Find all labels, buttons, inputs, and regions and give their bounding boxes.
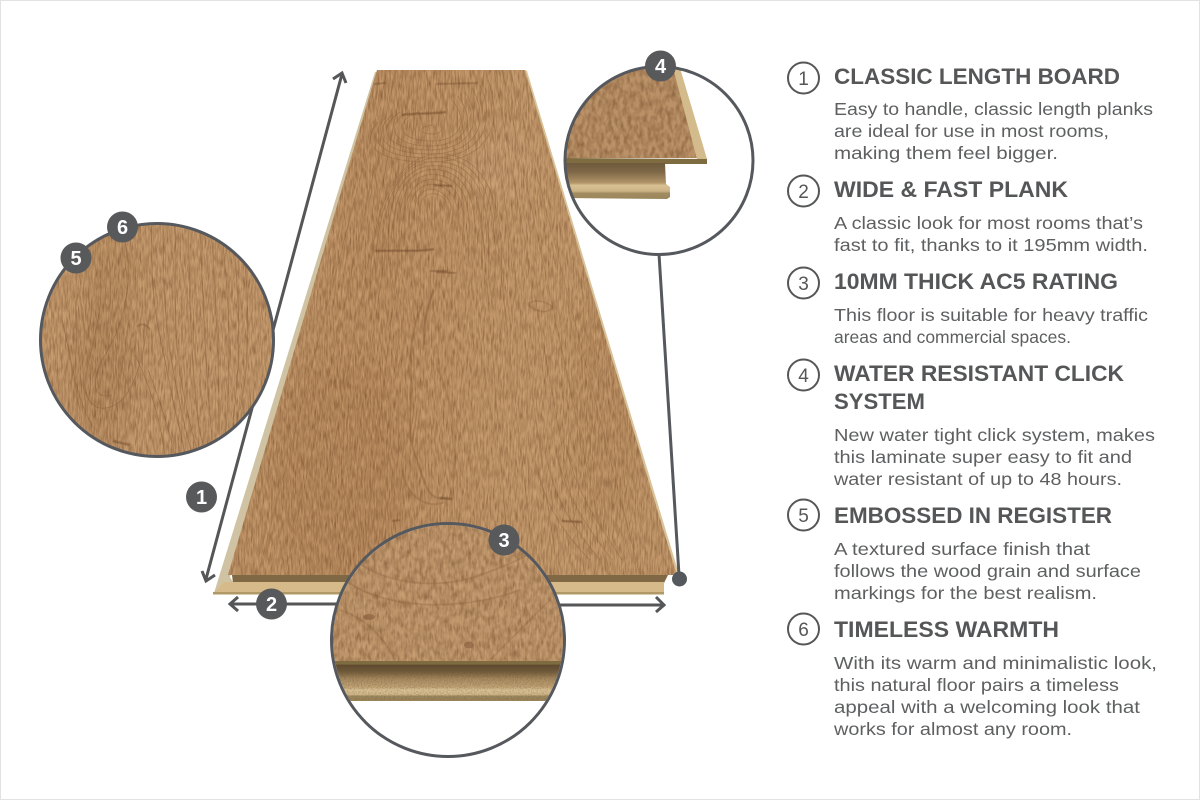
length arrow — [202, 73, 346, 581]
heading 1: CLASSIC LENGTH BOARD — [834, 64, 1120, 89]
description 5 — [834, 539, 1141, 603]
description 2 — [834, 213, 1148, 255]
badge 1: 1 — [196, 487, 207, 509]
icon: number 1 — [788, 62, 819, 94]
feature 1: classic length board — [788, 62, 1153, 163]
description 1: making them feel bigger. — [834, 143, 1058, 163]
description 5: A textured surface finish that — [834, 539, 1090, 559]
badge 3 — [488, 524, 520, 556]
badge 3: 3 — [498, 530, 510, 552]
feature 3: thickness and rating — [788, 268, 1148, 347]
icon: number 4 — [788, 360, 819, 390]
description 1 — [834, 99, 1153, 163]
description 6 — [833, 653, 1157, 739]
description 3: This floor is suitable for heavy traffic — [834, 305, 1148, 325]
plank right edge — [525, 70, 679, 575]
icon: number 6 — [788, 614, 819, 644]
heading 3: 10MM THICK AC5 RATING — [834, 269, 1118, 294]
badge 2 — [256, 588, 287, 620]
badge 2: 2 — [266, 594, 277, 616]
icon: number 4: 4 — [798, 366, 809, 387]
plank left edge — [214, 72, 379, 593]
badge 5 — [60, 242, 92, 274]
heading 2: WIDE & FAST PLANK — [834, 177, 1068, 202]
heading 4 — [834, 361, 1124, 414]
plank bottom strip — [213, 582, 664, 594]
icon: number 5: 5 — [798, 506, 809, 527]
description 2: A classic look for most rooms that’s — [834, 213, 1143, 233]
description 4: this laminate super easy to fit and — [834, 447, 1132, 467]
plank bottom groove — [232, 575, 668, 583]
description 6: works for almost any room. — [833, 719, 1072, 739]
feature 6: timeless warmth — [788, 614, 1157, 739]
icon: number 3 — [788, 268, 819, 298]
description 4 — [833, 425, 1155, 489]
badge 6: 6 — [117, 217, 128, 239]
badge 6 — [107, 212, 138, 242]
icon: number 2 — [788, 176, 819, 206]
magnifier: thickness — [330, 520, 566, 756]
heading 4: SYSTEM — [834, 389, 925, 414]
feature 2: wide and fast plank — [788, 176, 1148, 255]
badge 4: 4 — [655, 56, 667, 78]
heading 6: TIMELESS WARMTH — [834, 617, 1059, 642]
heading 5: EMBOSSED IN REGISTER — [834, 503, 1112, 528]
badge 4 — [645, 50, 676, 82]
wood surface — [220, 66, 685, 581]
icon: number 3: 3 — [798, 274, 809, 295]
description 3 — [834, 305, 1148, 347]
description 4: water resistant of up to 48 hours. — [833, 469, 1122, 489]
magnifier: click system — [560, 66, 753, 254]
description 6: this natural floor pairs a timeless — [834, 675, 1119, 695]
feature 5: embossed in register — [788, 500, 1141, 603]
description 1: are ideal for use in most rooms, — [834, 121, 1109, 141]
description 1: Easy to handle, classic length planks — [834, 99, 1153, 119]
heading 4: WATER RESISTANT CLICK — [834, 361, 1124, 386]
icon: number 2: 2 — [798, 182, 809, 203]
icon: number 1: 1 — [798, 69, 809, 90]
description 6: With its warm and minimalistic look, — [834, 653, 1157, 673]
description 5: markings for the best realism. — [834, 583, 1097, 603]
description 3: areas and commercial spaces. — [834, 327, 1071, 347]
feature 4: water resistant click system — [788, 360, 1155, 489]
badge 5: 5 — [70, 248, 82, 270]
leader line to click system — [659, 254, 687, 586]
icon: number 5 — [788, 500, 819, 530]
magnifier: surface texture — [40, 222, 274, 458]
description 4: New water tight click system, makes — [834, 425, 1155, 445]
click joint top surface — [566, 69, 697, 158]
description 2: fast to fit, thanks to it 195mm width. — [834, 235, 1148, 255]
description 6: appeal with a welcoming look that — [834, 697, 1140, 717]
click joint tongue — [560, 163, 670, 199]
width arrow — [230, 597, 664, 612]
icon: number 6: 6 — [798, 620, 809, 641]
plank board — [213, 66, 685, 594]
click joint edge — [673, 68, 707, 159]
badge 1 — [186, 482, 217, 512]
description 5: follows the wood grain and surface — [834, 561, 1141, 581]
